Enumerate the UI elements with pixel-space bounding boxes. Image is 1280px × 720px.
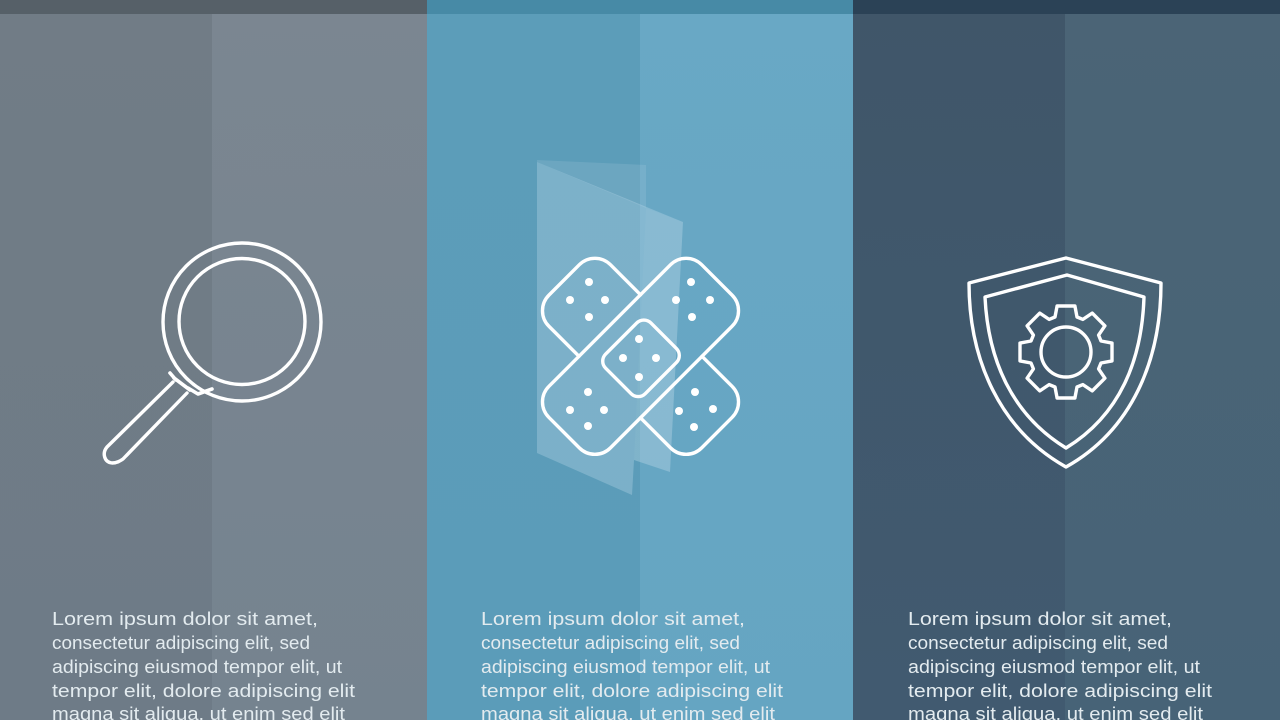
text block: shield description: adipiscing eiusmod tempor elit, ut xyxy=(908,656,1200,677)
text block: shield description: tempor elit, dolore adipiscing elit xyxy=(908,680,1212,701)
text block: bandage description xyxy=(481,608,783,720)
text block: search description xyxy=(52,608,355,720)
icon: translucent glass panels xyxy=(537,160,683,495)
text block: bandage description: adipiscing eiusmod tempor elit, ut xyxy=(481,656,770,677)
text block: bandage description: consectetur adipiscing elit, sed xyxy=(481,632,740,653)
icon: crossed bandages xyxy=(533,249,748,463)
text block: shield description xyxy=(908,608,1212,720)
text block: search description: tempor elit, dolore adipiscing elit xyxy=(52,680,355,701)
icon: magnifying glass xyxy=(104,243,321,463)
text block: bandage description: Lorem ipsum dolor sit amet, xyxy=(481,608,745,629)
text block: shield description: Lorem ipsum dolor sit amet, xyxy=(908,608,1172,629)
panel: search column xyxy=(0,0,427,720)
panel: shield column xyxy=(853,0,1280,720)
text block: shield description: consectetur adipiscing elit, sed xyxy=(908,632,1168,653)
text block: bandage description: tempor elit, dolore adipiscing elit xyxy=(481,680,783,701)
text block: search description: consectetur adipiscing elit, sed xyxy=(52,632,310,653)
text block: search description: Lorem ipsum dolor sit amet, xyxy=(52,608,318,629)
text block: search description: adipiscing eiusmod tempor elit, ut xyxy=(52,656,342,677)
icon: shield with gear xyxy=(969,258,1161,467)
panel: bandage column xyxy=(427,0,853,720)
